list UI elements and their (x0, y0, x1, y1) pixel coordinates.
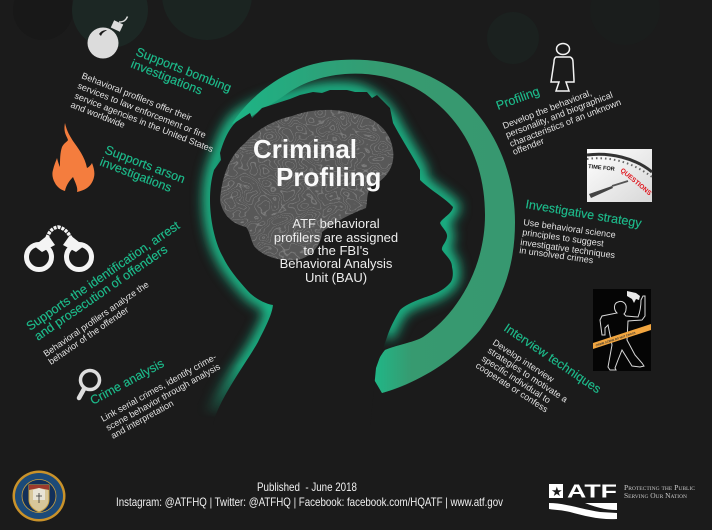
text: investigative strategy description: principles to suggest (522, 227, 605, 248)
ATF tagline (624, 485, 696, 500)
text: bombing description: Behavioral profilers offer their (80, 71, 193, 123)
heading: crime analysis: Crime analysis (88, 356, 166, 408)
text: investigative strategy description: in unsolved crimes (519, 245, 594, 265)
brain (220, 110, 394, 260)
ATF logo: ★ (551, 484, 563, 499)
text: identification description: behavior of the offender (46, 305, 130, 367)
text: investigative strategy description (519, 217, 616, 265)
footer text (116, 480, 503, 509)
heading: supports arson: investigations (98, 155, 174, 195)
text: bombing description: services to law enforcement or fire (76, 81, 207, 140)
faint background circles (13, 0, 660, 64)
text: profiling description: characteristics of an unknown (508, 97, 622, 149)
image: crime scene outline (593, 289, 651, 371)
green ribbon arc (232, 60, 515, 393)
icon: magnifying glass (79, 370, 100, 398)
intro text: ATF behavioral (292, 216, 380, 231)
ATF logo (549, 482, 617, 519)
heading: investigative strategy: Investigative strategy (525, 197, 643, 230)
intro text (274, 216, 398, 285)
text: interview techniques description (474, 337, 569, 415)
icon: person outline (551, 44, 574, 91)
text: interview techniques description: specific individual to (480, 353, 552, 405)
image: time for questions clock (587, 149, 653, 202)
icon: bomb (88, 16, 128, 58)
ATF logo: ATF (567, 482, 617, 502)
heading: supports bombing: Supports bombing (134, 45, 233, 95)
footer text: Published - June 2018 (257, 480, 357, 494)
text: profiling description: Develop the behavioral, (501, 88, 593, 131)
text: investigative strategy description: investigative techniques (520, 237, 616, 260)
heading: supports identification: and prosecution of offenders (32, 242, 170, 343)
intro text: to the FBI's (303, 243, 369, 258)
image: time for questions clock: TIME FOR (588, 164, 615, 173)
heading: supports arson: Supports arson (103, 143, 187, 186)
title: Profiling (276, 162, 381, 192)
heading: profiling: Profiling (494, 84, 542, 113)
ATF seal (12, 470, 66, 522)
text: interview techniques description: cooperate or confess (474, 360, 550, 415)
image: time for questions clock: QUESTIONS (619, 167, 653, 198)
footer text: Instagram: @ATFHQ | Twitter: @ATFHQ | Facebook: facebook.com/HQATF | www.atf.gov (116, 495, 503, 509)
text: crime analysis description: scene behavior through analysis (104, 361, 222, 433)
intro text: profilers are assigned (274, 230, 398, 245)
image: crime scene outline: CRIME SCENE DO NOT CROSS (595, 331, 636, 347)
title (253, 134, 381, 192)
text: profiling description: personality, and biographical (504, 90, 614, 140)
heading: interview techniques: Interview techniques (501, 321, 604, 396)
text: profiling description: offender (511, 136, 545, 157)
heading: supports identification: Supports the identification, arrest (24, 218, 183, 333)
text: interview techniques description: Develop interview (491, 337, 556, 385)
title: Criminal (253, 134, 357, 164)
ATF tagline: Serving Our Nation (624, 493, 687, 500)
text: bombing description: and worldwide (69, 100, 126, 130)
intro text: Behavioral Analysis (280, 256, 393, 271)
heading: supports bombing: investigations (129, 57, 205, 98)
icon: flame (52, 123, 94, 192)
intro text: Unit (BAU) (305, 270, 367, 285)
text: identification description: Behavioral profilers analyze the (41, 279, 151, 359)
text: crime analysis description: and interpretation (109, 398, 175, 441)
head silhouette glow (210, 89, 453, 420)
text: crime analysis description: Link serial crimes, identify crime- (99, 352, 218, 424)
text: bombing description: service agencies in the United States (73, 91, 215, 154)
ATF tagline: Protecting the Public (624, 485, 696, 492)
text: investigative strategy description: Use behavioral science (523, 217, 616, 240)
text: interview techniques description: strategies to motivate a (486, 345, 569, 404)
icon: handcuffs (26, 227, 92, 270)
head silhouette (210, 90, 453, 530)
